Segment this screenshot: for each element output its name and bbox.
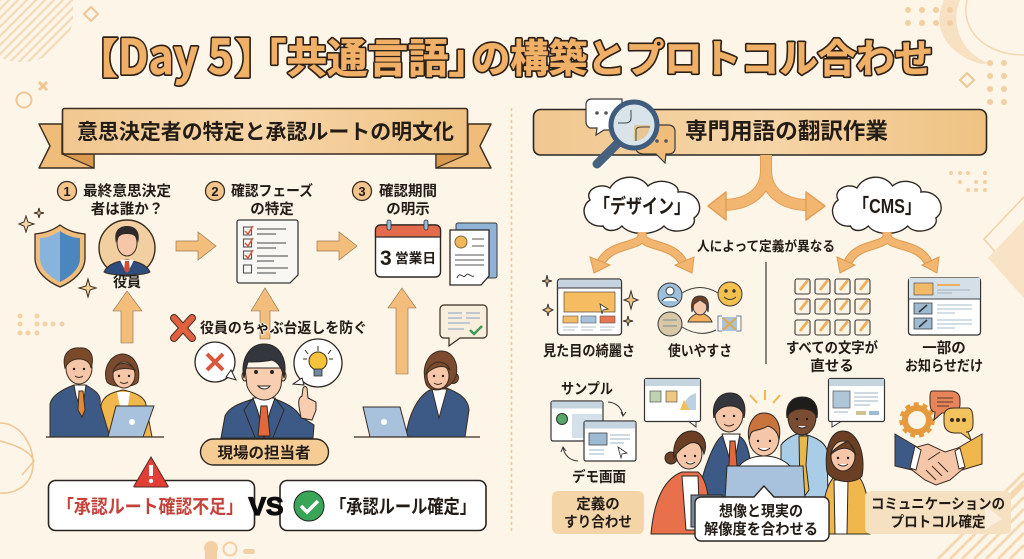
comparison box: insufficient: 「承認ルート確認不足」	[57, 496, 243, 518]
icon: pencil grid	[795, 279, 870, 335]
box: align definitions: すり合わせ	[564, 514, 632, 531]
icon: partial editing page	[908, 278, 980, 335]
label: all text editable: 直せる	[810, 357, 854, 375]
label: announcements only: お知らせだけ	[905, 358, 983, 375]
label: sample: サンプル	[561, 381, 613, 398]
icon: documents	[450, 223, 497, 285]
title: の構築とプロトコル合わせ	[472, 38, 933, 82]
comparison box: confirmed	[280, 480, 486, 530]
callout: align resolution: 解像度を合わせる	[704, 520, 818, 538]
label: announcements only	[905, 340, 983, 375]
panel: left ribbon heading	[39, 108, 491, 168]
decoration: top-right	[905, 0, 1024, 192]
icon: calendar 3 business days: 営業日	[395, 250, 436, 266]
icon: shield with sparkles	[19, 208, 96, 297]
title: Day 5	[118, 18, 233, 88]
person: central staff	[221, 344, 316, 440]
arrow: up 3	[388, 288, 416, 374]
title: 】	[235, 36, 276, 82]
decoration: right diamonds	[984, 197, 1024, 298]
step 2 label: の特定	[250, 201, 294, 218]
callout: align resolution	[695, 486, 829, 541]
decoration: dots left	[18, 314, 64, 336]
people: left pair at laptop	[46, 348, 164, 437]
box: communication protocol: プロトコル確定	[890, 514, 986, 531]
bubble: light bulb	[293, 339, 342, 387]
title	[77, 18, 933, 88]
arrows: CMS branches	[837, 232, 939, 273]
heading text: 意思決定者の特定と承認ルートの明文化	[77, 121, 454, 144]
title: の構築とプロトコル合わせ	[472, 38, 933, 82]
heading text: 専門用語の翻訳作業	[685, 119, 888, 144]
title: 「共通言語」	[246, 36, 489, 82]
badge: field staff: 現場の担当者	[218, 444, 310, 462]
VS: VS	[248, 493, 284, 521]
callout: align resolution: 想像と現実の	[719, 503, 803, 520]
label: appearance: 見た目の綺麗さ	[543, 343, 635, 360]
box: communication protocol	[865, 491, 1011, 534]
arrows: design branches	[590, 232, 694, 273]
step 2 label	[206, 182, 313, 218]
icon: beautiful web page	[542, 275, 638, 335]
comparison box: insufficient	[48, 480, 254, 530]
step 3 label: 3	[358, 184, 366, 199]
icon: green check	[294, 491, 324, 521]
icon: calendar 3 business days	[376, 220, 440, 277]
sparks	[750, 390, 780, 403]
people: team around laptop	[651, 393, 870, 534]
bubble: check comment	[440, 305, 487, 346]
step 2 label: 2	[211, 184, 219, 199]
title: 「共通言語」	[246, 36, 489, 82]
arrow: split to two terms	[708, 155, 825, 220]
comparison box: confirmed: 「承認ルール確定」	[330, 496, 476, 518]
icon: sample and demo screens	[551, 401, 636, 461]
label: announcements only: 一部の	[922, 340, 966, 357]
step 3 label	[352, 182, 437, 218]
title: 】	[235, 36, 276, 82]
arrow: up 1	[113, 291, 142, 343]
bubble: browser right	[828, 378, 884, 427]
decoration: left shapes	[0, 7, 98, 493]
label: demo screen: デモ画面	[572, 468, 626, 486]
warning text: prevent reversal	[174, 318, 367, 338]
step 1 label: 者は誰か？	[91, 200, 163, 218]
box: align definitions	[552, 491, 644, 534]
step 3 label: 確認期間	[379, 183, 437, 200]
cloud: design: 「デザイン」	[594, 194, 690, 218]
arrow: step 1 to 2	[176, 232, 216, 260]
arrow: up 2	[251, 288, 279, 339]
title: Day 5	[118, 18, 233, 88]
box: align definitions: 定義の	[576, 496, 620, 513]
decoration: bottom-right stripes	[938, 473, 1024, 559]
box: communication protocol: コミュニケーションの	[871, 496, 1005, 513]
icon: executive portrait	[99, 220, 155, 290]
label: usability: 使いやすさ	[668, 342, 732, 360]
decoration: bottom circles	[204, 541, 255, 559]
label: all text editable	[786, 339, 878, 375]
icon: usability	[658, 282, 742, 336]
warning text: prevent reversal: 役員のちゃぶ台返しを防ぐ	[200, 319, 367, 337]
bubble: browser left	[644, 378, 700, 427]
person: right worker	[354, 351, 480, 437]
arrow: step 2 to 3	[317, 232, 357, 260]
panel: right heading	[534, 110, 986, 155]
note: definitions differ: 人によって定義が異なる	[697, 238, 835, 254]
step 1 label: 最終意思決定	[83, 182, 171, 200]
title: 【	[77, 36, 118, 82]
label: all text editable: すべての文字が	[786, 339, 878, 357]
step 1 label	[58, 182, 171, 218]
step 3 label: の明示	[386, 202, 430, 218]
icon: magnifier with bubbles	[586, 99, 675, 164]
divider	[765, 262, 767, 364]
icon: warning triangle	[134, 457, 168, 487]
icon: checklist	[237, 220, 298, 283]
title: 【	[77, 36, 118, 82]
decoration: top-left stripes	[0, 0, 73, 62]
cloud: CMS: 「CMS」	[853, 195, 921, 218]
icon: gear and bubbles	[901, 391, 973, 440]
badge: field staff	[200, 439, 328, 465]
step 2 label: 確認フェーズ	[231, 182, 313, 200]
icon: calendar 3 business days: 3	[380, 247, 392, 270]
bubble: X	[195, 342, 236, 382]
central dashed divider	[510, 108, 512, 532]
step 1 label: 1	[63, 184, 71, 199]
cloud: CMS	[833, 177, 941, 234]
icon: handshake	[895, 434, 982, 485]
cloud: design	[584, 177, 700, 234]
icon: executive portrait: 役員	[113, 274, 141, 290]
